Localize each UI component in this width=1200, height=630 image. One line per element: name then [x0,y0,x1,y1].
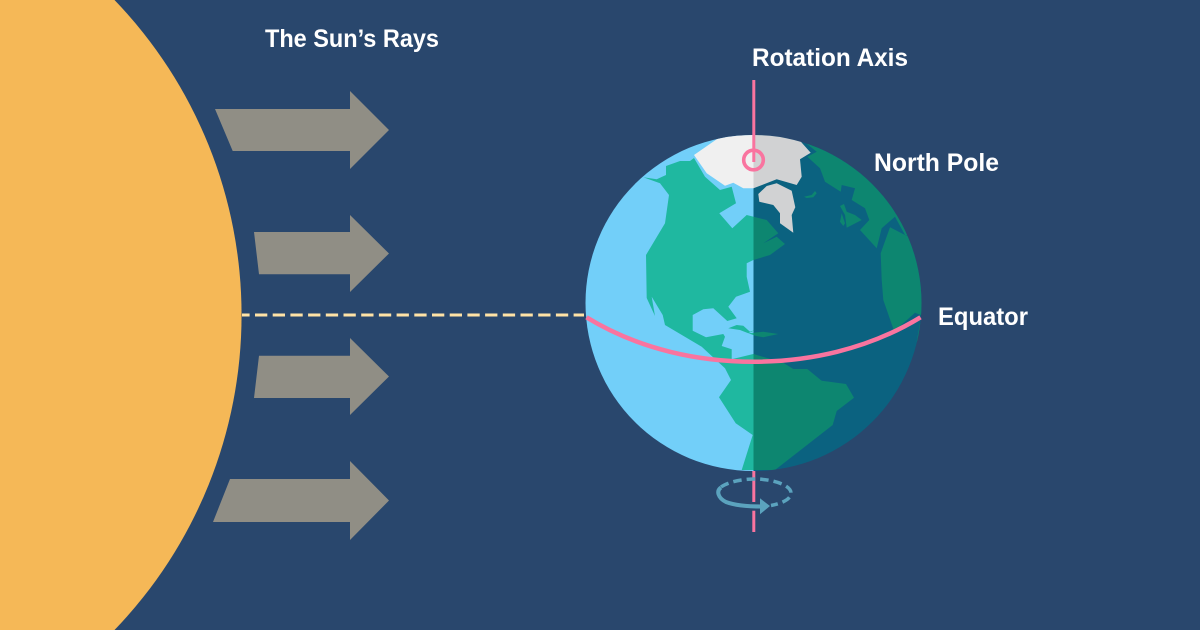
dashed line: sun to equator [242,314,584,316]
rotation axis [744,80,763,532]
globe: sunlit half [586,135,754,471]
icon: rotation arrow [718,479,791,514]
label: North Pole: North Pole [874,149,999,177]
sun [0,0,242,630]
label: Equator: Equator [938,303,1028,331]
heading: The Sun's Rays: The Sun’s Rays [265,25,439,53]
equator line [586,317,920,362]
globe [585,130,925,471]
arrow: sun ray 1 [215,91,389,169]
label: Rotation Axis: Rotation Axis [752,44,908,72]
globe: shaded half [754,135,922,471]
arrow: sun ray 3 [254,338,389,415]
arrow: sun ray 2 [254,215,389,292]
arrow: sun ray 4 [213,461,389,540]
